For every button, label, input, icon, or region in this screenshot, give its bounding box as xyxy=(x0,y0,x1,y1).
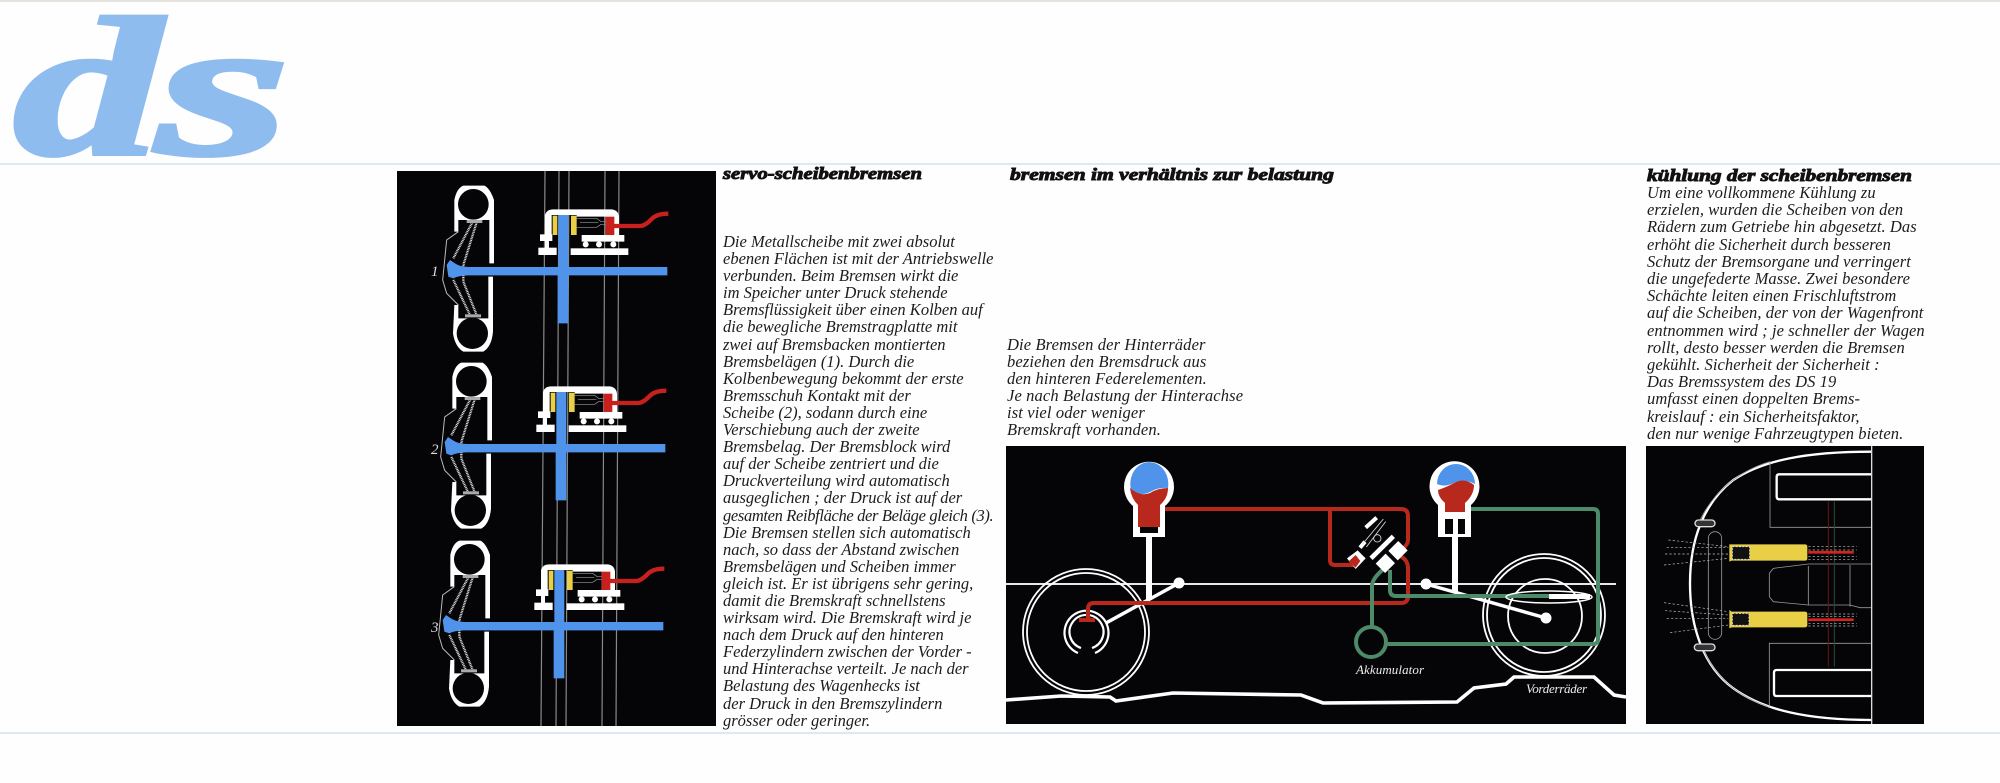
hydraulic pipes: red xyxy=(1079,509,1408,620)
text block: servo-scheibenbremsen: Druckverteilung wird automatisch xyxy=(723,471,950,490)
air streams xyxy=(1664,540,1857,633)
label: Akkumulator: Akkumulator xyxy=(1355,662,1425,677)
text block: servo-scheibenbremsen: Scheibe (2), sodann durch eine xyxy=(723,403,927,422)
drive shafts xyxy=(1828,502,1834,667)
text block: bremsen im verhältnis zur belastung: Je nach Belastung der Hinterachse xyxy=(1007,386,1243,405)
front suspension arm xyxy=(1421,535,1551,623)
text block: servo-scheibenbremsen: Kolbenbewegung bekommt der erste xyxy=(723,369,964,388)
text block: servo-scheibenbremsen: zwei auf Bremsbacken montierten xyxy=(723,335,946,354)
rear reservoir xyxy=(1124,462,1174,537)
rear wheel xyxy=(1023,569,1149,695)
diagram: brake stage 2 xyxy=(441,363,666,529)
text block: servo-scheibenbremsen: Bremsbelägen (1). Durch die xyxy=(723,352,914,371)
label: 3: 3 xyxy=(430,620,438,636)
text block: servo-scheibenbremsen: ausgeglichen ; der Druck ist auf der xyxy=(723,488,962,507)
label: 2: 2 xyxy=(431,442,439,458)
heading: kühlung der scheibenbremsen: kühlung der scheibenbremsen xyxy=(1647,166,1912,185)
text block: kühlung der scheibenbremsen: Rädern zum Getriebe hin abgesetzt. Das xyxy=(1647,217,1917,236)
text block: kühlung der scheibenbremsen: auf die Scheiben, der von der Wagenfront xyxy=(1647,303,1923,322)
text block: kühlung der scheibenbremsen: Schächte leiten einen Frischluftstrom xyxy=(1647,286,1896,305)
text block: servo-scheibenbremsen: gesamten Reibfläche der Beläge gleich (3). xyxy=(723,506,993,524)
text block: servo-scheibenbremsen: der Druck in den Bremszylindern xyxy=(723,694,942,713)
text block: bremsen im verhältnis zur belastung xyxy=(1006,335,1243,439)
yellow air duct bottom xyxy=(1729,610,1807,628)
text block: bremsen im verhältnis zur belastung: ist viel oder weniger xyxy=(1007,403,1145,422)
text block: kühlung der scheibenbremsen xyxy=(1646,183,1925,443)
text block: kühlung der scheibenbremsen: rollt, desto besser werden die Bremsen xyxy=(1647,338,1905,357)
text block: kühlung der scheibenbremsen: die ungefederte Masse. Zwei besondere xyxy=(1647,269,1910,288)
diagram: brake stage 1 xyxy=(443,186,668,352)
text block: servo-scheibenbremsen: Belastung des Wagenhecks ist xyxy=(723,676,920,695)
text block: kühlung der scheibenbremsen: kreislauf : ein Sicherheitsfaktor, xyxy=(1647,407,1860,426)
text block: kühlung der scheibenbremsen: Das Bremssystem des DS 19 xyxy=(1647,372,1836,391)
text block: servo-scheibenbremsen: Bremsbelag. Der Bremsblock wird xyxy=(723,437,950,456)
label: 1: 1 xyxy=(431,264,438,280)
text block: kühlung der scheibenbremsen: gekühlt. Sicherheit der Sicherheit : xyxy=(1647,355,1880,374)
text block: servo-scheibenbremsen xyxy=(722,232,994,730)
panel: brake cooling plan view xyxy=(1646,446,1924,724)
text block: servo-scheibenbremsen: nach dem Druck auf den hinteren xyxy=(723,625,944,644)
text block: servo-scheibenbremsen: Verschiebung auch der zweite xyxy=(723,420,920,439)
top edge xyxy=(0,0,2000,2)
text block: servo-scheibenbremsen: Bremsflüssigkeit über einen Kolben auf xyxy=(723,300,983,319)
text block: servo-scheibenbremsen: Federzylindern zwischen der Vorder - xyxy=(723,642,972,661)
divider line xyxy=(1870,446,1874,724)
text block: servo-scheibenbremsen: wirksam wird. Die Bremskraft wird je xyxy=(723,608,971,627)
text block: servo-scheibenbremsen: im Speicher unter Druck stehende xyxy=(723,283,948,302)
lower rule xyxy=(0,732,2000,734)
front brake cylinder xyxy=(1506,591,1592,603)
panel: disc brake sequence xyxy=(397,171,716,726)
text block: kühlung der scheibenbremsen: Um eine vollkommene Kühlung zu xyxy=(1647,183,1876,202)
diagram: brake stage 3 xyxy=(439,541,664,707)
text block: servo-scheibenbremsen: damit die Bremskraft schnellstens xyxy=(723,591,946,610)
front reservoir xyxy=(1430,461,1480,537)
text block: kühlung der scheibenbremsen: umfasst einen doppelten Brems- xyxy=(1647,389,1860,408)
axle line xyxy=(1006,583,1616,585)
brake discs xyxy=(1808,551,1854,621)
text block: servo-scheibenbremsen: grösser oder geringer. xyxy=(723,711,870,730)
duct grilles xyxy=(1732,547,1750,625)
text block: kühlung der scheibenbremsen: entnommen wird ; je schneller der Wagen xyxy=(1647,321,1925,340)
upper rule xyxy=(0,163,2000,165)
chassis lines xyxy=(1700,462,1872,707)
text block: servo-scheibenbremsen: gleich ist. Er ist übrigens sehr gering, xyxy=(723,574,973,593)
road surface xyxy=(1006,677,1626,703)
heading: servo-scheibenbremsen: servo-scheibenbremsen xyxy=(722,164,922,183)
text block: bremsen im verhältnis zur belastung: den hinteren Federelementen. xyxy=(1007,369,1207,388)
front wheel xyxy=(1483,554,1605,676)
text block: servo-scheibenbremsen: Bremsschuh Kontakt mit der xyxy=(723,386,911,405)
yellow air duct top xyxy=(1729,544,1807,562)
logo: ds xyxy=(13,0,291,198)
text block: bremsen im verhältnis zur belastung: beziehen den Bremsdruck aus xyxy=(1007,352,1206,371)
front wheels xyxy=(1774,474,1872,696)
label: Vorderräder: Vorderräder xyxy=(1526,681,1588,696)
heading: bremsen im verhältnis zur belastung: bremsen im verhältnis zur belastung xyxy=(1010,165,1335,184)
text block: servo-scheibenbremsen: nach, so dass der Abstand zwischen xyxy=(723,540,959,559)
text block: kühlung der scheibenbremsen: den nur wenige Fahrzeugtypen bieten. xyxy=(1647,424,1903,443)
text block: bremsen im verhältnis zur belastung: Bremskraft vorhanden. xyxy=(1007,420,1161,439)
hydraulic pipes: green xyxy=(1356,509,1598,657)
text block: kühlung der scheibenbremsen: erzielen, wurden die Scheiben von den xyxy=(1647,200,1903,219)
panel: brake circuit diagram xyxy=(1006,446,1626,724)
text block: servo-scheibenbremsen: auf der Scheibe zentriert und die xyxy=(723,454,939,473)
car body outline xyxy=(1690,452,1872,720)
text block: kühlung der scheibenbremsen: erhöht die Sicherheit durch besseren xyxy=(1647,235,1891,254)
text block: servo-scheibenbremsen: Die Metallscheibe mit zwei absolut xyxy=(723,232,955,251)
text block: servo-scheibenbremsen: ebenen Flächen ist mit der Antriebswelle xyxy=(723,249,994,268)
text block: kühlung der scheibenbremsen: Schutz der Bremsorgane und verringert xyxy=(1647,252,1911,271)
text block: bremsen im verhältnis zur belastung: Die Bremsen der Hinterräder xyxy=(1007,335,1206,354)
text block: servo-scheibenbremsen: und Hinterachse verteilt. Je nach der xyxy=(723,659,969,678)
valve block xyxy=(1347,518,1408,573)
text block: servo-scheibenbremsen: verbunden. Beim Bremsen wirkt die xyxy=(723,266,958,285)
bumpers xyxy=(1694,520,1715,651)
rear suspension arm xyxy=(1106,535,1184,623)
text block: servo-scheibenbremsen: Die Bremsen stellen sich automatisch xyxy=(723,523,971,542)
text block: servo-scheibenbremsen: Bremsbelägen und Scheiben immer xyxy=(723,557,956,576)
text block: servo-scheibenbremsen: die bewegliche Bremstragplatte mit xyxy=(723,317,957,336)
